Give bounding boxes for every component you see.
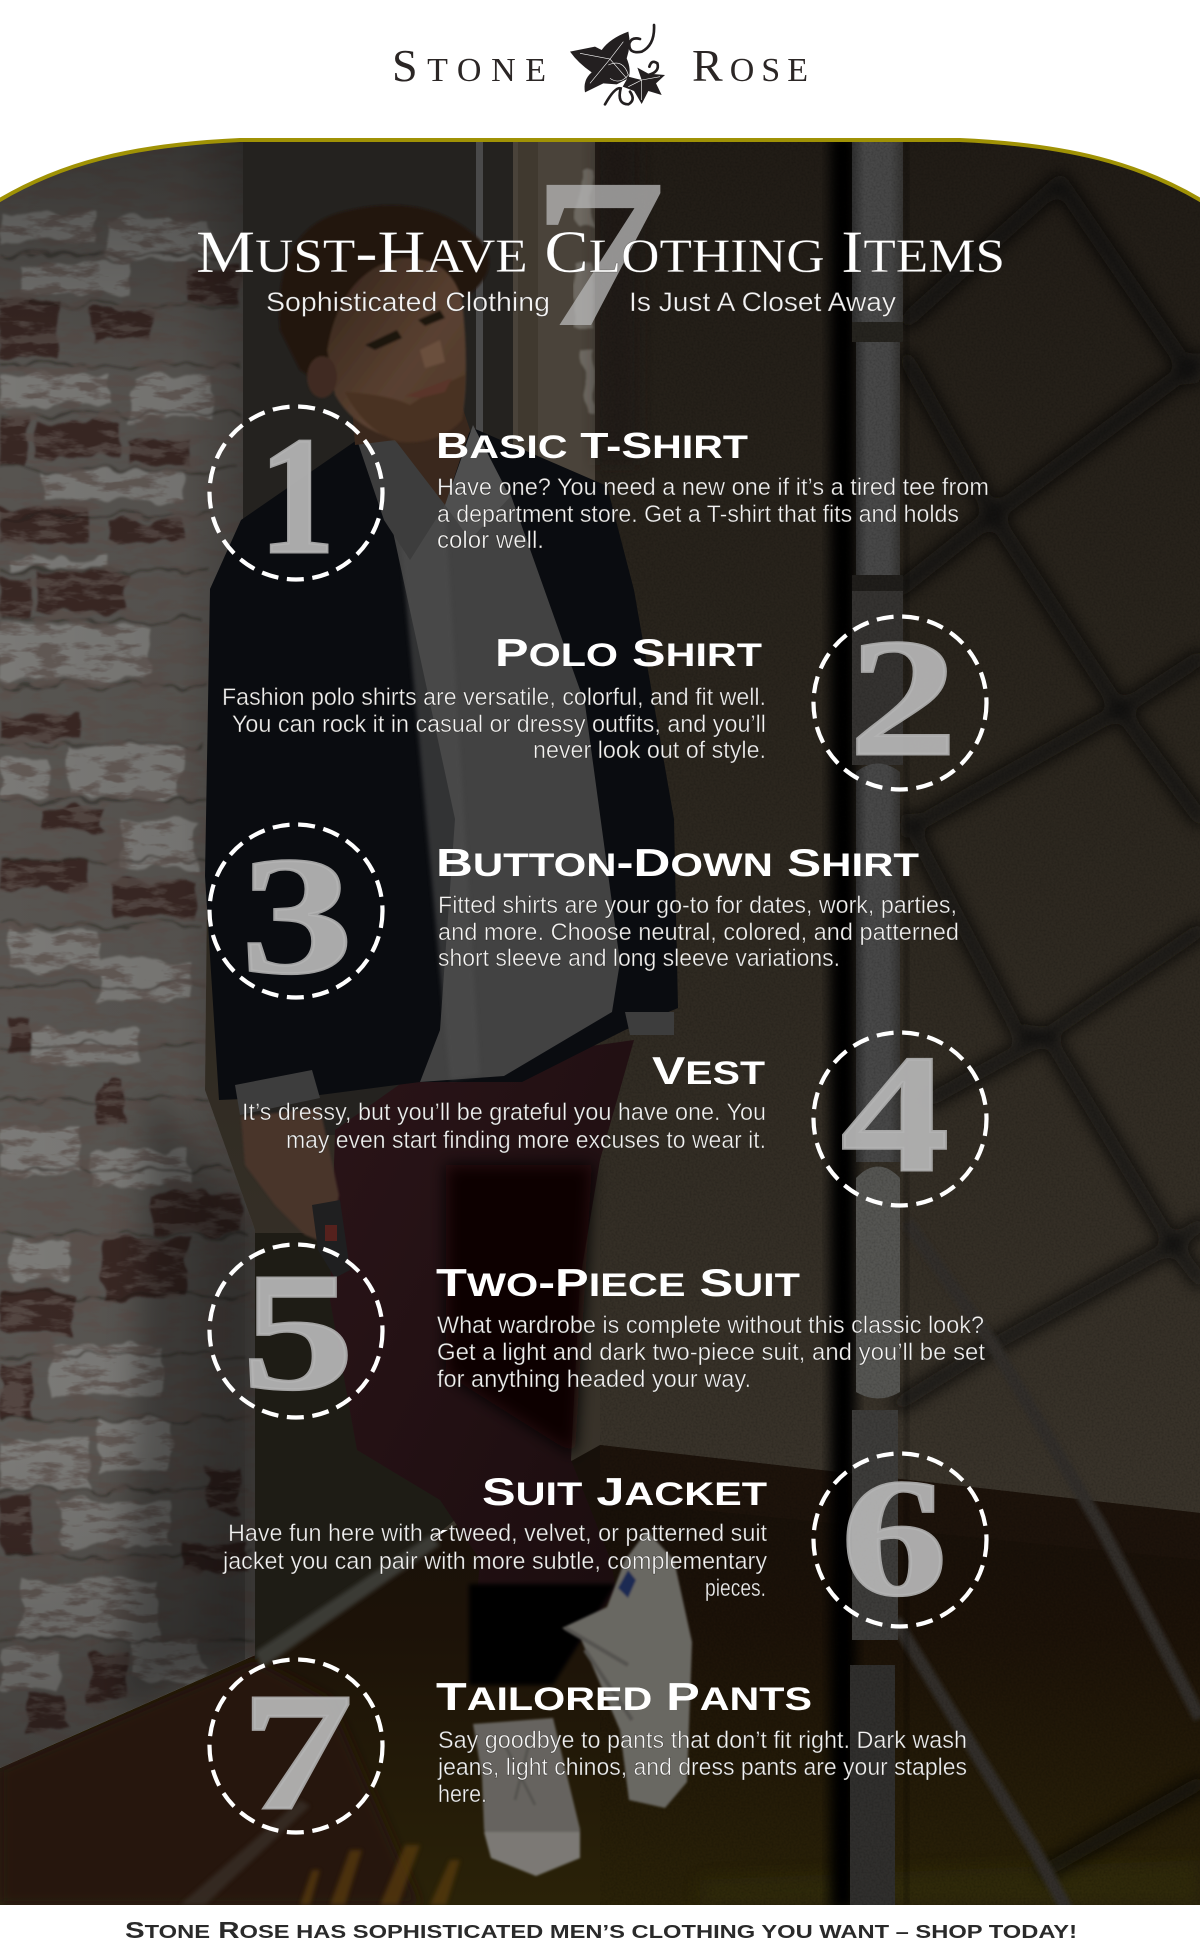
text 5 (437, 1312, 985, 1393)
subtitle: Sophisticated Clothing (266, 287, 550, 317)
subtitle (266, 287, 897, 317)
gold arch line (0, 140, 1200, 201)
badge 5: 5 (242, 1239, 354, 1425)
badge 1: 1 (259, 403, 335, 589)
text 1: Have one? You need a new one if it’s a tired tee from (437, 474, 989, 501)
text 2: never look out of style. (533, 737, 766, 764)
text 4: It’s dressy, but you’ll be grateful you have one. You (242, 1099, 766, 1126)
sleeve cuffs (235, 1012, 674, 1115)
item 3: button-down shirt (210, 823, 959, 1009)
item 5: two-piece suit (210, 1239, 985, 1425)
heading 7: TAILORED P ANTS (436, 1676, 812, 1719)
heading 3: B UTTON -D OWN S HIRT (436, 842, 920, 885)
badge 7 (210, 1659, 382, 1845)
pants (330, 1040, 634, 1685)
text 7: here. (438, 1781, 487, 1808)
heading 5: TWO -P IECE S UIT (436, 1262, 801, 1305)
text 2: You can rock it in casual or dressy outfits, and you’ll (232, 711, 766, 738)
badge 4 (814, 1021, 986, 1207)
text 2: Fashion polo shirts are versatile, colorful, and fit well. (222, 684, 766, 711)
shirt (357, 425, 620, 1082)
face (307, 258, 466, 442)
brick wall (0, 130, 258, 1770)
man (205, 205, 692, 1876)
item 2: polo shirt (222, 605, 986, 791)
floor (0, 1445, 1200, 1905)
badge 5 (210, 1239, 382, 1425)
text 5: Get a light and dark two-piece suit, and you’ll be set (437, 1339, 985, 1366)
text 7 (437, 1727, 967, 1808)
badge 3: 3 (241, 823, 353, 1009)
pole (830, 135, 909, 1910)
heading 6: SUIT J ACKET (482, 1471, 768, 1514)
text 1: color well. (437, 527, 544, 554)
brick mottling (0, 130, 258, 1770)
logo word: Rose: ROSE (692, 40, 808, 91)
text 3: Fitted shirts are your go-to for dates, work, parties, (438, 892, 957, 919)
title: MUST-HAVE CLOTHING ITEMS (196, 219, 1005, 285)
shoes (473, 1531, 692, 1876)
fence bars in foreground (898, 1329, 1200, 1905)
badge 1 (210, 403, 382, 589)
text 2 (222, 684, 766, 764)
heading 1: BASIC T-S HIRT (436, 425, 749, 466)
logo word: Stone: S TONE (392, 40, 546, 91)
jacket (205, 428, 678, 1100)
item 6: suit jacket (222, 1445, 986, 1631)
text 1 (437, 474, 989, 554)
text 4 (242, 1099, 766, 1154)
item 1: basic t-shirt (210, 403, 989, 589)
text 7: Say goodbye to pants that don’t fit right. Dark wash (438, 1727, 967, 1754)
heading 2: POLO S HIRT (495, 632, 763, 675)
text 3 (438, 892, 959, 972)
text 3: and more. Choose neutral, colored, and patterned (438, 919, 959, 946)
neck (353, 410, 470, 505)
badge 4: 4 (841, 1021, 949, 1207)
badge 6 (814, 1445, 986, 1631)
doorway (243, 135, 595, 1668)
footer call to action: STONE R OSE HAS SOPHISTICATED MEN’S CLOTHING YOU WANT – SHOP TODAY! (125, 1917, 1077, 1943)
text 5: What wardrobe is complete without this classic look? (437, 1312, 984, 1339)
text 6: jacket you can pair with more subtle, complementary (222, 1548, 767, 1575)
logo icon: rose (570, 25, 665, 104)
subtitle: Is Just A Closet Away (629, 287, 897, 317)
badge 7: 7 (241, 1659, 353, 1845)
text 7: jeans, light chinos, and dress pants are your staples (437, 1754, 967, 1781)
logo (392, 25, 808, 104)
text 1: a department store. Get a T-shirt that fits and holds (437, 501, 959, 528)
plaster texture (600, 135, 1200, 1905)
item 7: tailored pants (210, 1659, 967, 1845)
text 5: for anything headed your way. (437, 1366, 751, 1393)
text 6: Have fun here with a tweed, velvet, or patterned suit (228, 1520, 767, 1547)
text 6 (222, 1520, 767, 1602)
text 4: may even start finding more excuses to wear it. (286, 1127, 766, 1154)
wall (205, 142, 1200, 1530)
item 4: vest (242, 1021, 986, 1207)
hand and keys (241, 1108, 350, 1278)
wall corner shadow (588, 143, 595, 433)
badge 3 (210, 823, 382, 1009)
text 3: short sleeve and long sleeve variations. (438, 945, 840, 972)
heading 4: VEST (652, 1050, 766, 1093)
badge 2: 2 (849, 605, 957, 791)
hair (279, 205, 489, 390)
big numeral 7 behind title: 7 (531, 135, 667, 372)
fence shadows on wall (900, 182, 1200, 1870)
text 6: pieces. (705, 1575, 766, 1602)
badge 2 (814, 605, 986, 791)
badge 6: 6 (841, 1445, 947, 1631)
